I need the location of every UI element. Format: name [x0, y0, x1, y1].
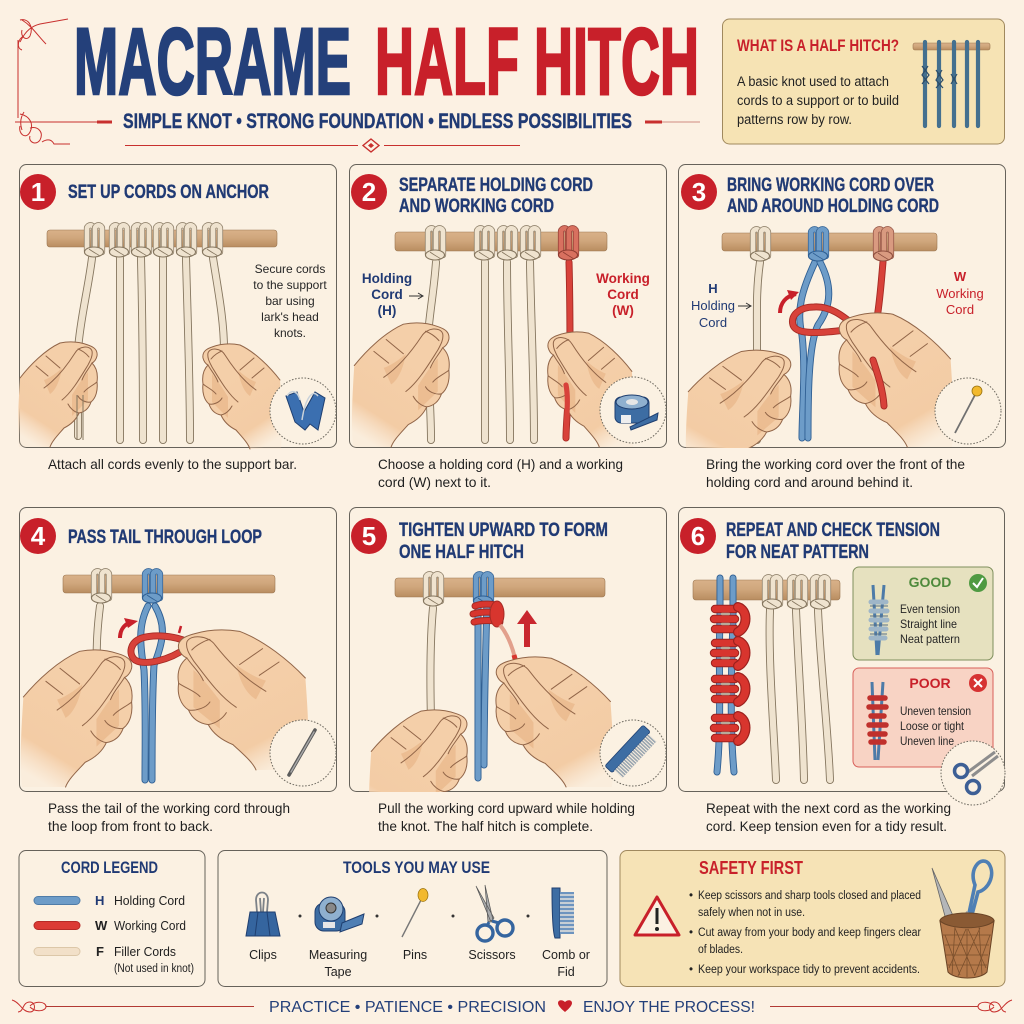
legend: working cord: W [95, 918, 108, 933]
legend: filler cords: F [96, 944, 104, 959]
label: holding cord: Cord [371, 287, 403, 302]
caption step 3: holding cord and around behind it. [706, 474, 913, 490]
label: measuring tape: Tape [324, 965, 352, 979]
legend: holding cord: H [95, 893, 104, 908]
label: clips: Clips [249, 948, 277, 962]
poor list [900, 704, 971, 748]
good list: Neat pattern [900, 632, 960, 646]
poor example card [853, 668, 993, 767]
good title: GOOD [909, 574, 951, 590]
legend title: CORD LEGEND [61, 858, 158, 877]
safety title: SAFETY FIRST [699, 858, 803, 878]
caption step 6: cord. Keep tension even for a tidy result. [706, 818, 947, 834]
step badge 2 [351, 174, 387, 210]
panel: step 1 [18, 164, 336, 449]
caption step 5 [378, 800, 635, 834]
label: holding cord: Holding [362, 271, 412, 286]
good knot sample [870, 585, 888, 655]
heading: PASS TAIL THROUGH LOOP [68, 527, 262, 548]
caption step 2: Choose a holding cord (H) and a working [378, 456, 623, 472]
arrow to holding cord [409, 293, 423, 299]
panel: what is a half hitch [722, 19, 1004, 144]
label: comb or fid [542, 948, 590, 979]
step badge 1 [20, 174, 56, 210]
tool inset: measuring tape [600, 377, 666, 443]
title: MACRAME [74, 9, 351, 115]
subtitle: SIMPLE KNOT • STRONG FOUNDATION • ENDLESS POSSIBILITIES [123, 110, 632, 133]
label: holding cord: Cord [699, 315, 727, 330]
heading [726, 520, 940, 563]
heading [727, 175, 939, 217]
step badge 3: 3 [692, 177, 706, 207]
label: holding cord: H [708, 281, 718, 296]
definition text: cords to a support or to build [737, 93, 899, 108]
good example card [853, 567, 993, 660]
legend: working cord: Working Cord [114, 919, 186, 933]
tool inset: fid [270, 720, 336, 786]
note text: knots. [274, 326, 306, 340]
safety bullets: safely when not in use. [698, 907, 805, 919]
footer rule left [12, 1000, 254, 1012]
curved red arrow [780, 290, 799, 313]
good list: Straight line [900, 617, 957, 631]
good list: Even tension [900, 602, 960, 616]
caption step 2 [378, 456, 623, 490]
label: measuring tape: Measuring [309, 948, 367, 962]
illustration: cords on bar with hands [18, 225, 282, 449]
step badge 6 [680, 518, 716, 554]
icon: pin [402, 888, 428, 937]
title: HALF HITCH [375, 9, 699, 115]
step badge 4: 4 [31, 521, 46, 551]
label: holding cord [362, 271, 412, 318]
panel: cord legend [19, 850, 205, 986]
step badge 6: 6 [691, 521, 705, 551]
panel: step 6 [678, 508, 1005, 805]
legend: holding cord: Holding Cord [114, 894, 185, 908]
definition text [737, 74, 899, 127]
caption step 5: Pull the working cord upward while holding [378, 800, 635, 816]
heading [399, 520, 608, 563]
caption step 4: Pass the tail of the working cord through [48, 800, 290, 816]
label: holding cord: (H) [378, 303, 396, 318]
caption step 6: Repeat with the next cord as the working [706, 800, 951, 816]
panel: safety first [620, 850, 1005, 986]
label: working cord: Cord [946, 302, 974, 317]
heading: ONE HALF HITCH [399, 542, 524, 563]
note text: lark's head [261, 310, 319, 324]
illustration: repeated hitches [693, 577, 840, 780]
caption step 4 [48, 800, 290, 834]
icon: comb [552, 888, 574, 938]
legend: filler cords: Filler Cords [114, 945, 176, 959]
caption step 4: the loop from front to back. [48, 818, 213, 834]
safety bullets: of blades. [698, 944, 743, 956]
subtitle rules and diamond [97, 122, 700, 152]
step badge 5 [351, 518, 387, 554]
curved red arrow [120, 618, 181, 638]
header corner flourish [15, 19, 97, 144]
heading: FOR NEAT PATTERN [726, 542, 869, 563]
label: scissors: Scissors [468, 948, 516, 962]
tool inset: scissors [941, 741, 1005, 805]
note text: Secure cords [255, 262, 325, 276]
safety bullets: Keep scissors and sharp tools closed and placed [698, 890, 921, 902]
caption step 2: cord (W) next to it. [378, 474, 491, 490]
heading: WHAT IS A HALF HITCH? [737, 37, 899, 55]
footer [12, 999, 1012, 1016]
panel: step 5 [349, 507, 667, 792]
caption step 1: Attach all cords evenly to the support bar. [48, 456, 297, 472]
label: working cord [596, 271, 650, 318]
good list [900, 602, 960, 646]
footer motto: PRACTICE • PATIENCE • PRECISION [269, 999, 546, 1016]
poor list: Uneven tension [900, 704, 971, 718]
step badge 2: 2 [362, 177, 376, 207]
safety bullets: • [689, 927, 693, 939]
heading: REPEAT AND CHECK TENSION [726, 520, 940, 541]
illustration: tail through loop [21, 571, 308, 787]
definition text: A basic knot used to attach [737, 74, 889, 89]
label: working cord: (W) [612, 303, 634, 318]
legend: filler cords: (Not used in knot) [114, 963, 194, 975]
icon: basket with scissors [932, 861, 994, 978]
heading: SEPARATE HOLDING CORD [399, 175, 593, 196]
poor list: Uneven line [900, 734, 954, 748]
step badge 4 [20, 518, 56, 554]
safety bullets: Cut away from your body and keep fingers clear [698, 927, 921, 939]
heading: SET UP CORDS ON ANCHOR [68, 182, 269, 203]
label: measuring tape [309, 948, 367, 979]
tool inset: clip [270, 378, 336, 444]
safety bullets [689, 890, 921, 976]
footer rule right [770, 1000, 1012, 1012]
panel: step 3 [678, 164, 1006, 471]
label: working cord: W [954, 269, 967, 284]
label: holding cord [691, 281, 735, 330]
safety bullets: Keep your workspace tidy to prevent accidents. [698, 964, 920, 976]
step badge 3 [681, 174, 717, 210]
caption step 6 [706, 800, 951, 834]
definition text: patterns row by row. [737, 112, 852, 127]
icon: cross [969, 674, 987, 692]
legend: holding cord [34, 893, 185, 908]
panel: step 2 [350, 164, 666, 448]
label: working cord: Working [936, 286, 984, 301]
panel: tools you may use [218, 850, 607, 986]
icon: mini cords on bar [913, 42, 990, 126]
note text: to the support [253, 278, 327, 292]
poor title: POOR [909, 675, 951, 691]
heading: AND AROUND HOLDING CORD [727, 196, 939, 217]
icon: scissors [476, 885, 513, 941]
poor list: Loose or tight [900, 719, 965, 733]
step badge 1: 1 [31, 177, 45, 207]
icon: heart [558, 1000, 572, 1012]
heading: BRING WORKING CORD OVER [727, 175, 934, 196]
caption step 5: the knot. The half hitch is complete. [378, 818, 593, 834]
tool inset: comb [600, 720, 666, 786]
step badge 5: 5 [362, 521, 376, 551]
legend: filler cords [34, 944, 194, 975]
note text [253, 262, 327, 340]
note text: bar using [265, 294, 315, 308]
label: working cord: Cord [607, 287, 639, 302]
panel: step 4 [20, 508, 336, 792]
heading: AND WORKING CORD [399, 196, 554, 217]
illustration: holding and working cords [352, 228, 634, 447]
tools title: TOOLS YOU MAY USE [343, 858, 490, 877]
icon: check [969, 574, 987, 592]
icon: warning triangle [635, 897, 679, 935]
footer closing line: ENJOY THE PROCESS! [583, 999, 755, 1016]
caption step 3 [706, 456, 965, 490]
tool inset: pin [935, 378, 1001, 444]
illustration: working cord over holding cord [686, 229, 953, 471]
heading [399, 175, 593, 217]
label: holding cord: Holding [691, 298, 735, 313]
icon: measuring tape [315, 897, 364, 932]
separator dots [298, 914, 530, 918]
safety bullets: • [689, 890, 693, 902]
label: working cord: Working [596, 271, 650, 286]
label: comb or fid: Comb or [542, 948, 590, 962]
label: comb or fid: Fid [557, 965, 575, 979]
illustration: tightened half hitch [369, 571, 612, 792]
legend: working cord [34, 918, 186, 933]
arrow to holding cord [738, 303, 751, 309]
poor knot sample [869, 682, 886, 760]
label: working cord [936, 269, 984, 317]
arrow: pull upward [517, 610, 537, 647]
caption step 3: Bring the working cord over the front of the [706, 456, 965, 472]
heading: TIGHTEN UPWARD TO FORM [399, 520, 608, 541]
label: pins: Pins [403, 948, 427, 962]
icon: binder clip [246, 892, 280, 936]
safety bullets: • [689, 964, 693, 976]
